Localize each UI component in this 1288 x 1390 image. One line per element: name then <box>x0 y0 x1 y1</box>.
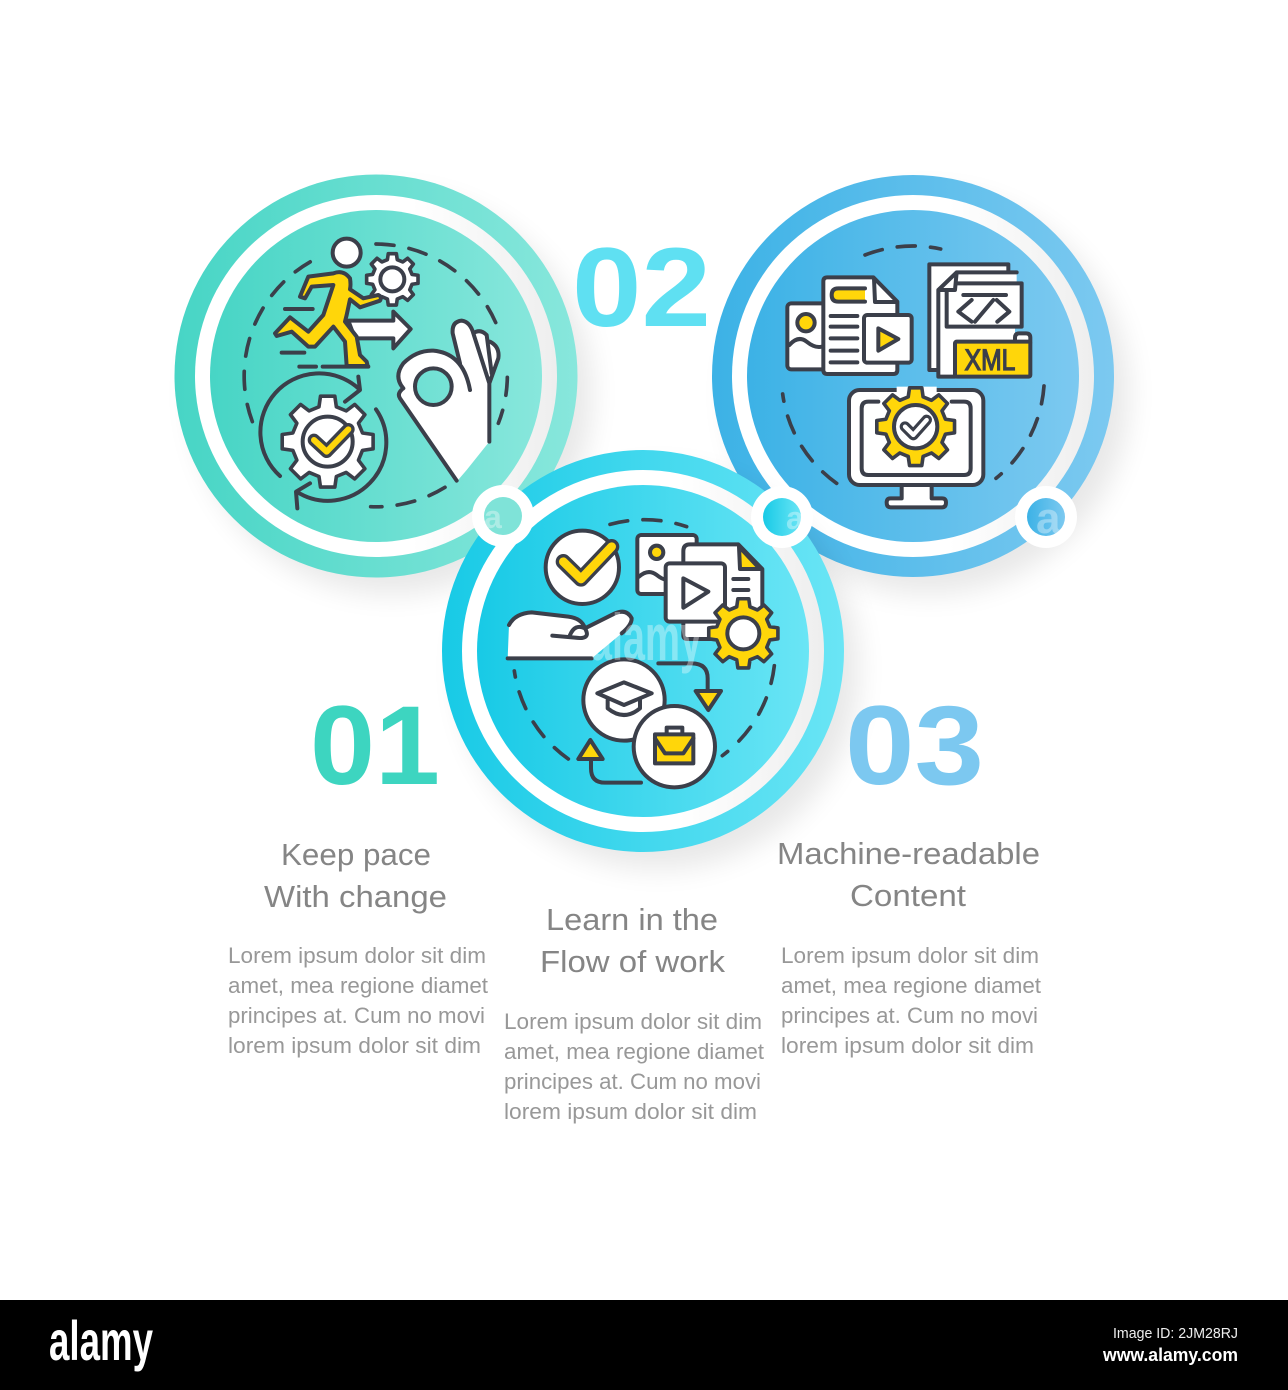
marker: dot on second circle: a <box>1036 494 1061 543</box>
marker: dot on third circle <box>751 486 813 548</box>
text block: third column body <box>781 943 1041 1058</box>
number 02: 02 <box>572 225 711 350</box>
text block: first column body: Lorem ipsum dolor sit dim <box>228 943 486 968</box>
text block: third column body: principes at. Cum no movi <box>781 1003 1038 1028</box>
text block: first column body <box>228 943 488 1058</box>
text block: second column body <box>504 1009 764 1124</box>
text block: second column body: amet, mea regione diamet <box>504 1039 764 1064</box>
text block: second column body: lorem ipsum dolor sit dim <box>504 1099 757 1124</box>
icon: check, hand, media, graduation cap and briefcase <box>508 520 778 787</box>
heading: machine-readable content <box>777 836 1040 913</box>
heading: keep pace with change: Keep pace <box>281 837 431 872</box>
footer image id: Image ID: 2JM28RJ <box>1113 1325 1238 1342</box>
watermark: alamy over centre: alamy <box>590 600 702 674</box>
text block: first column body: principes at. Cum no movi <box>228 1003 485 1028</box>
heading: learn in the flow of work <box>540 902 726 979</box>
heading: machine-readable content: Machine-readable <box>777 836 1040 871</box>
footer logo: alamy <box>49 1309 153 1372</box>
footer url: www.alamy.com <box>1102 1345 1238 1365</box>
footer bar <box>0 1300 1288 1390</box>
heading: keep pace with change <box>264 837 447 914</box>
text block: second column body: Lorem ipsum dolor sit dim <box>504 1009 762 1034</box>
number 03: 03 <box>845 683 984 808</box>
text: XML label: XML <box>965 344 1015 377</box>
panel: machine-readable circle <box>712 175 1129 594</box>
number 01: 01 <box>310 683 440 808</box>
text block: first column body: lorem ipsum dolor sit dim <box>228 1033 481 1058</box>
panel: learn in the flow of work circle <box>442 450 859 869</box>
heading: learn in the flow of work: Learn in the <box>546 902 718 937</box>
text block: third column body: amet, mea regione diamet <box>781 973 1041 998</box>
text block: third column body: lorem ipsum dolor sit dim <box>781 1033 1034 1058</box>
text block: second column body: principes at. Cum no movi <box>504 1069 761 1094</box>
marker: dot on first circle: a <box>484 499 502 535</box>
heading: machine-readable content: Content <box>850 878 966 913</box>
text block: first column body: amet, mea regione diamet <box>228 973 488 998</box>
marker: dot on first circle <box>472 485 534 547</box>
text block: third column body: Lorem ipsum dolor sit dim <box>781 943 1039 968</box>
heading: learn in the flow of work: Flow of work <box>540 944 726 979</box>
panel: keep pace circle <box>174 174 592 594</box>
marker: dot on second circle <box>1015 486 1077 548</box>
marker: dot on third circle: a <box>786 500 804 536</box>
icon: runner, gears and OK hand <box>244 239 507 508</box>
icon: media documents, XML file and monitor <box>783 246 1044 507</box>
heading: keep pace with change: With change <box>264 879 447 914</box>
